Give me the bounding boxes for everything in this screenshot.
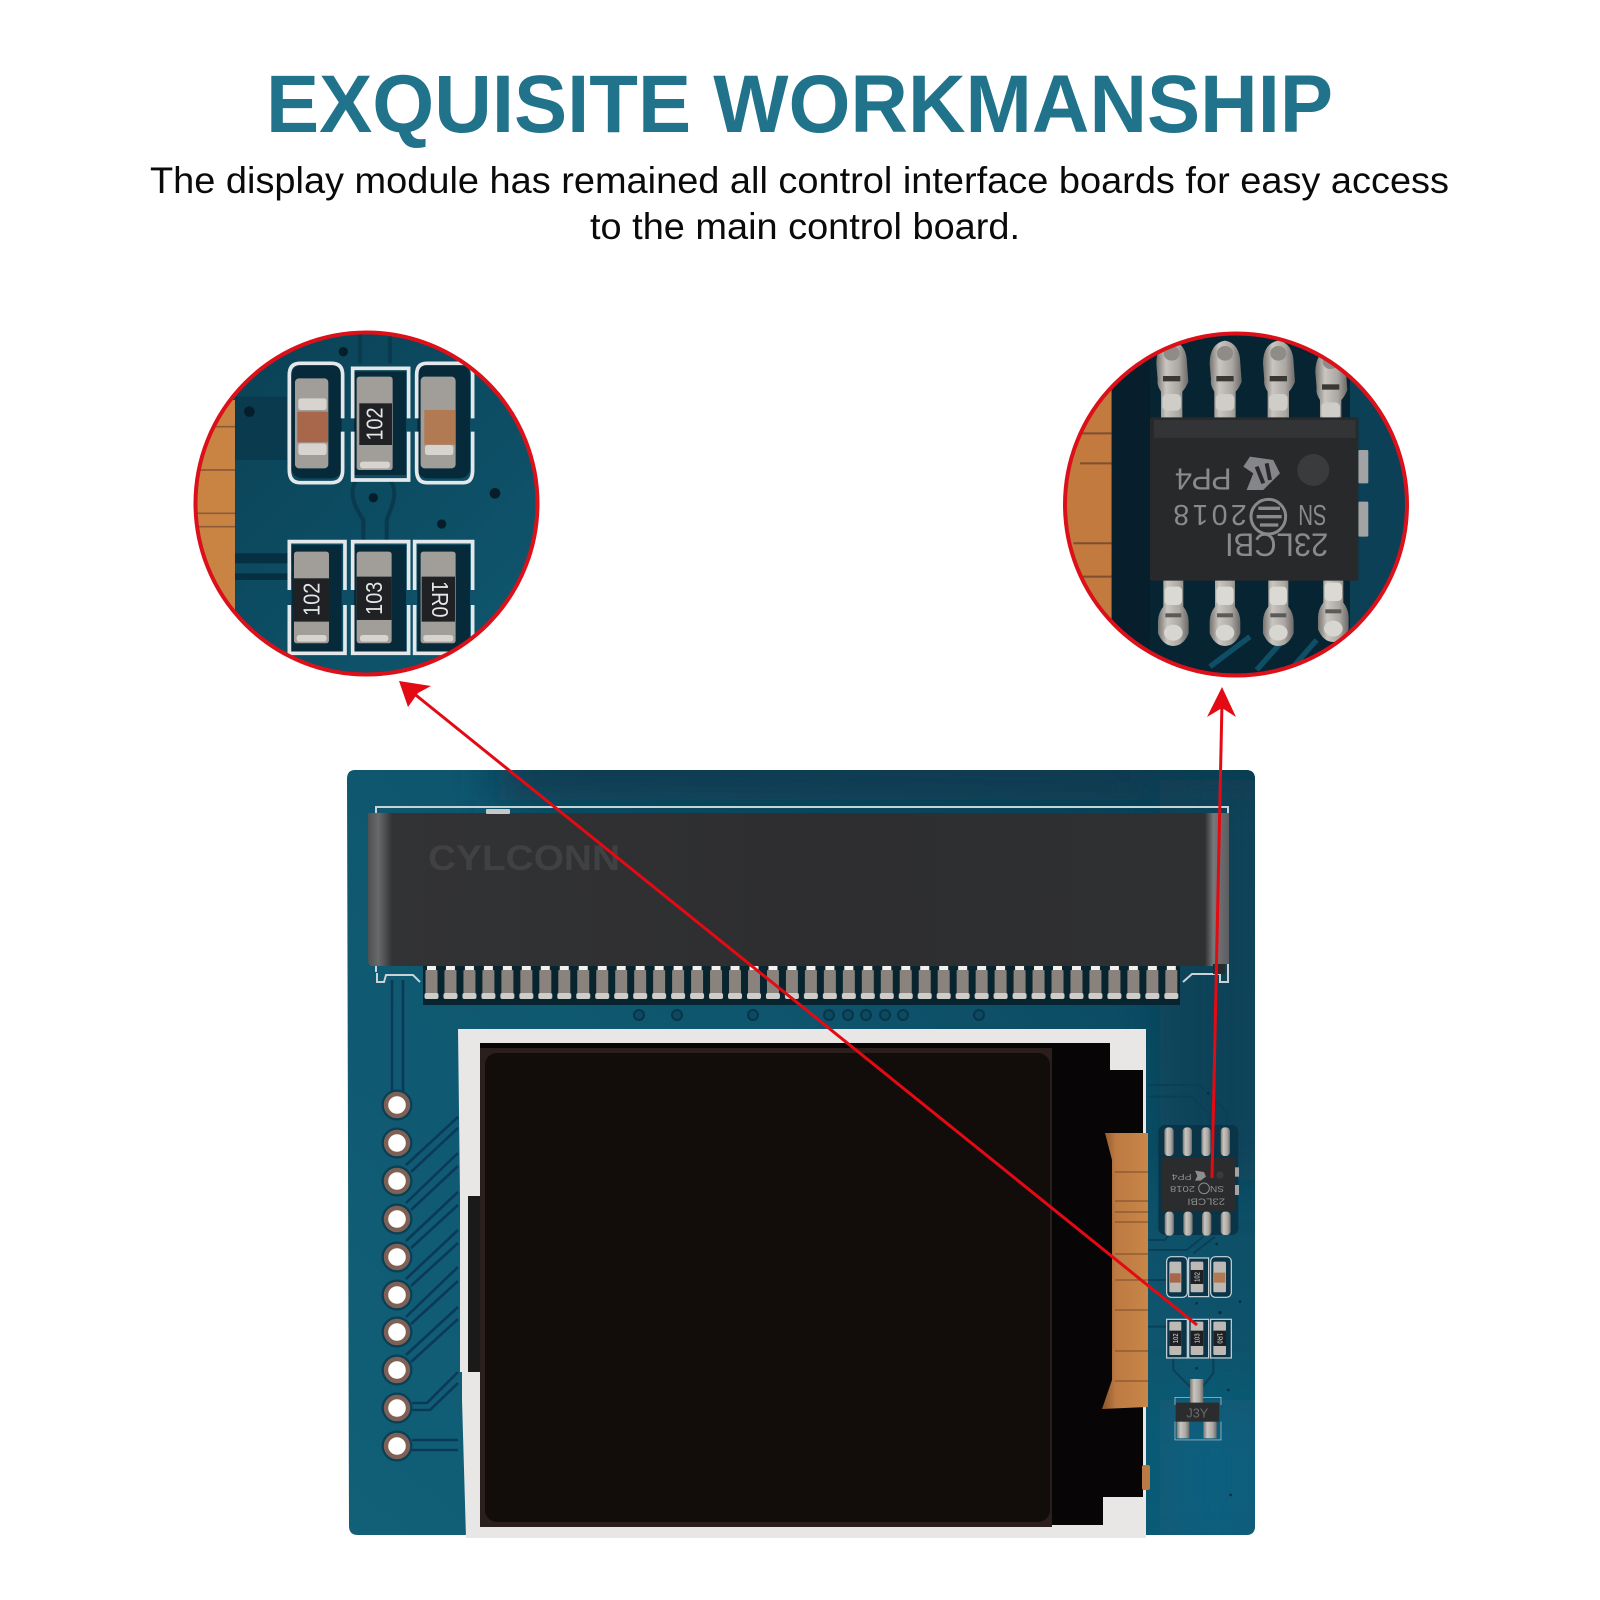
panel: circuit board photo (347, 770, 1255, 1538)
connector pin strip (423, 964, 1183, 1006)
connector housing (368, 809, 1229, 974)
memory chip SOIC (1158, 1125, 1239, 1236)
silkscreen boxes (292, 365, 470, 652)
vias under connector (634, 1010, 984, 1020)
chip markings (1173, 461, 1328, 563)
arrow: memory chip to close-up circle (1207, 687, 1236, 1178)
callout: resistor close-up circle (190, 328, 545, 683)
SMD resistor array (1167, 1257, 1231, 1358)
left side traces (392, 980, 458, 1450)
chip markings: SN (1298, 498, 1327, 530)
chip markings: 2018 (1173, 498, 1247, 530)
chip markings: PP4 (1175, 461, 1232, 495)
SMD resistor array: 102 (1194, 1272, 1202, 1282)
pin header holes (382, 1090, 412, 1462)
LCD white frame (458, 1029, 1146, 1538)
chip markings: 23LCBI (1225, 526, 1328, 563)
capacitors and resistors (294, 377, 456, 643)
board substrate (347, 770, 1255, 1535)
memory chip SOIC: 2018 (1169, 1184, 1195, 1193)
LCD screen (485, 1053, 1050, 1522)
chip legs (1156, 341, 1349, 646)
microchip logo (1243, 457, 1280, 490)
callout: resistor close-up circle: 1R0 (427, 581, 454, 617)
subtitle text block: to the main control board. (590, 206, 1020, 247)
right side traces (1148, 1085, 1227, 1390)
lower right components (zoom coordinate group) (1148, 1085, 1241, 1496)
subtitle text block: The display module has remained all control interface boards for easy access (150, 160, 1449, 201)
callout: resistor close-up circle: 102 (361, 407, 388, 441)
SMD resistor array: 103 (1194, 1333, 1202, 1343)
SMD resistor array: 102 (1172, 1333, 1180, 1343)
SMD resistor array: 1R0 (1215, 1333, 1223, 1344)
flex ribbon cable (1102, 1133, 1150, 1490)
small vias (1195, 1092, 1241, 1496)
callout: resistor close-up circle: 103 (360, 582, 387, 615)
memory chip SOIC: SN (1210, 1184, 1224, 1193)
subtitle text block (150, 160, 1449, 247)
transistor SOT-23 (1175, 1379, 1221, 1440)
memory chip SOIC: 23LCBI (1187, 1196, 1225, 1206)
memory chip SOIC: PP4 (1171, 1172, 1192, 1181)
ribbon in close-up (198, 400, 235, 610)
chip side tabs (1358, 450, 1368, 483)
LCD dark housing (480, 1043, 1143, 1525)
callout: resistor close-up circle: 102 (298, 583, 325, 616)
callout: memory chip close-up circle (1060, 328, 1417, 683)
title: EXQUISITE WORKMANSHIP (266, 59, 1333, 150)
transistor SOT-23: J3Y (1186, 1406, 1209, 1420)
chip body (1150, 417, 1358, 581)
arrow: resistor array to close-up circle (399, 681, 1197, 1325)
connector brand mark: CYLCONN (428, 839, 620, 878)
silkscreen outline around connector (376, 807, 1228, 982)
